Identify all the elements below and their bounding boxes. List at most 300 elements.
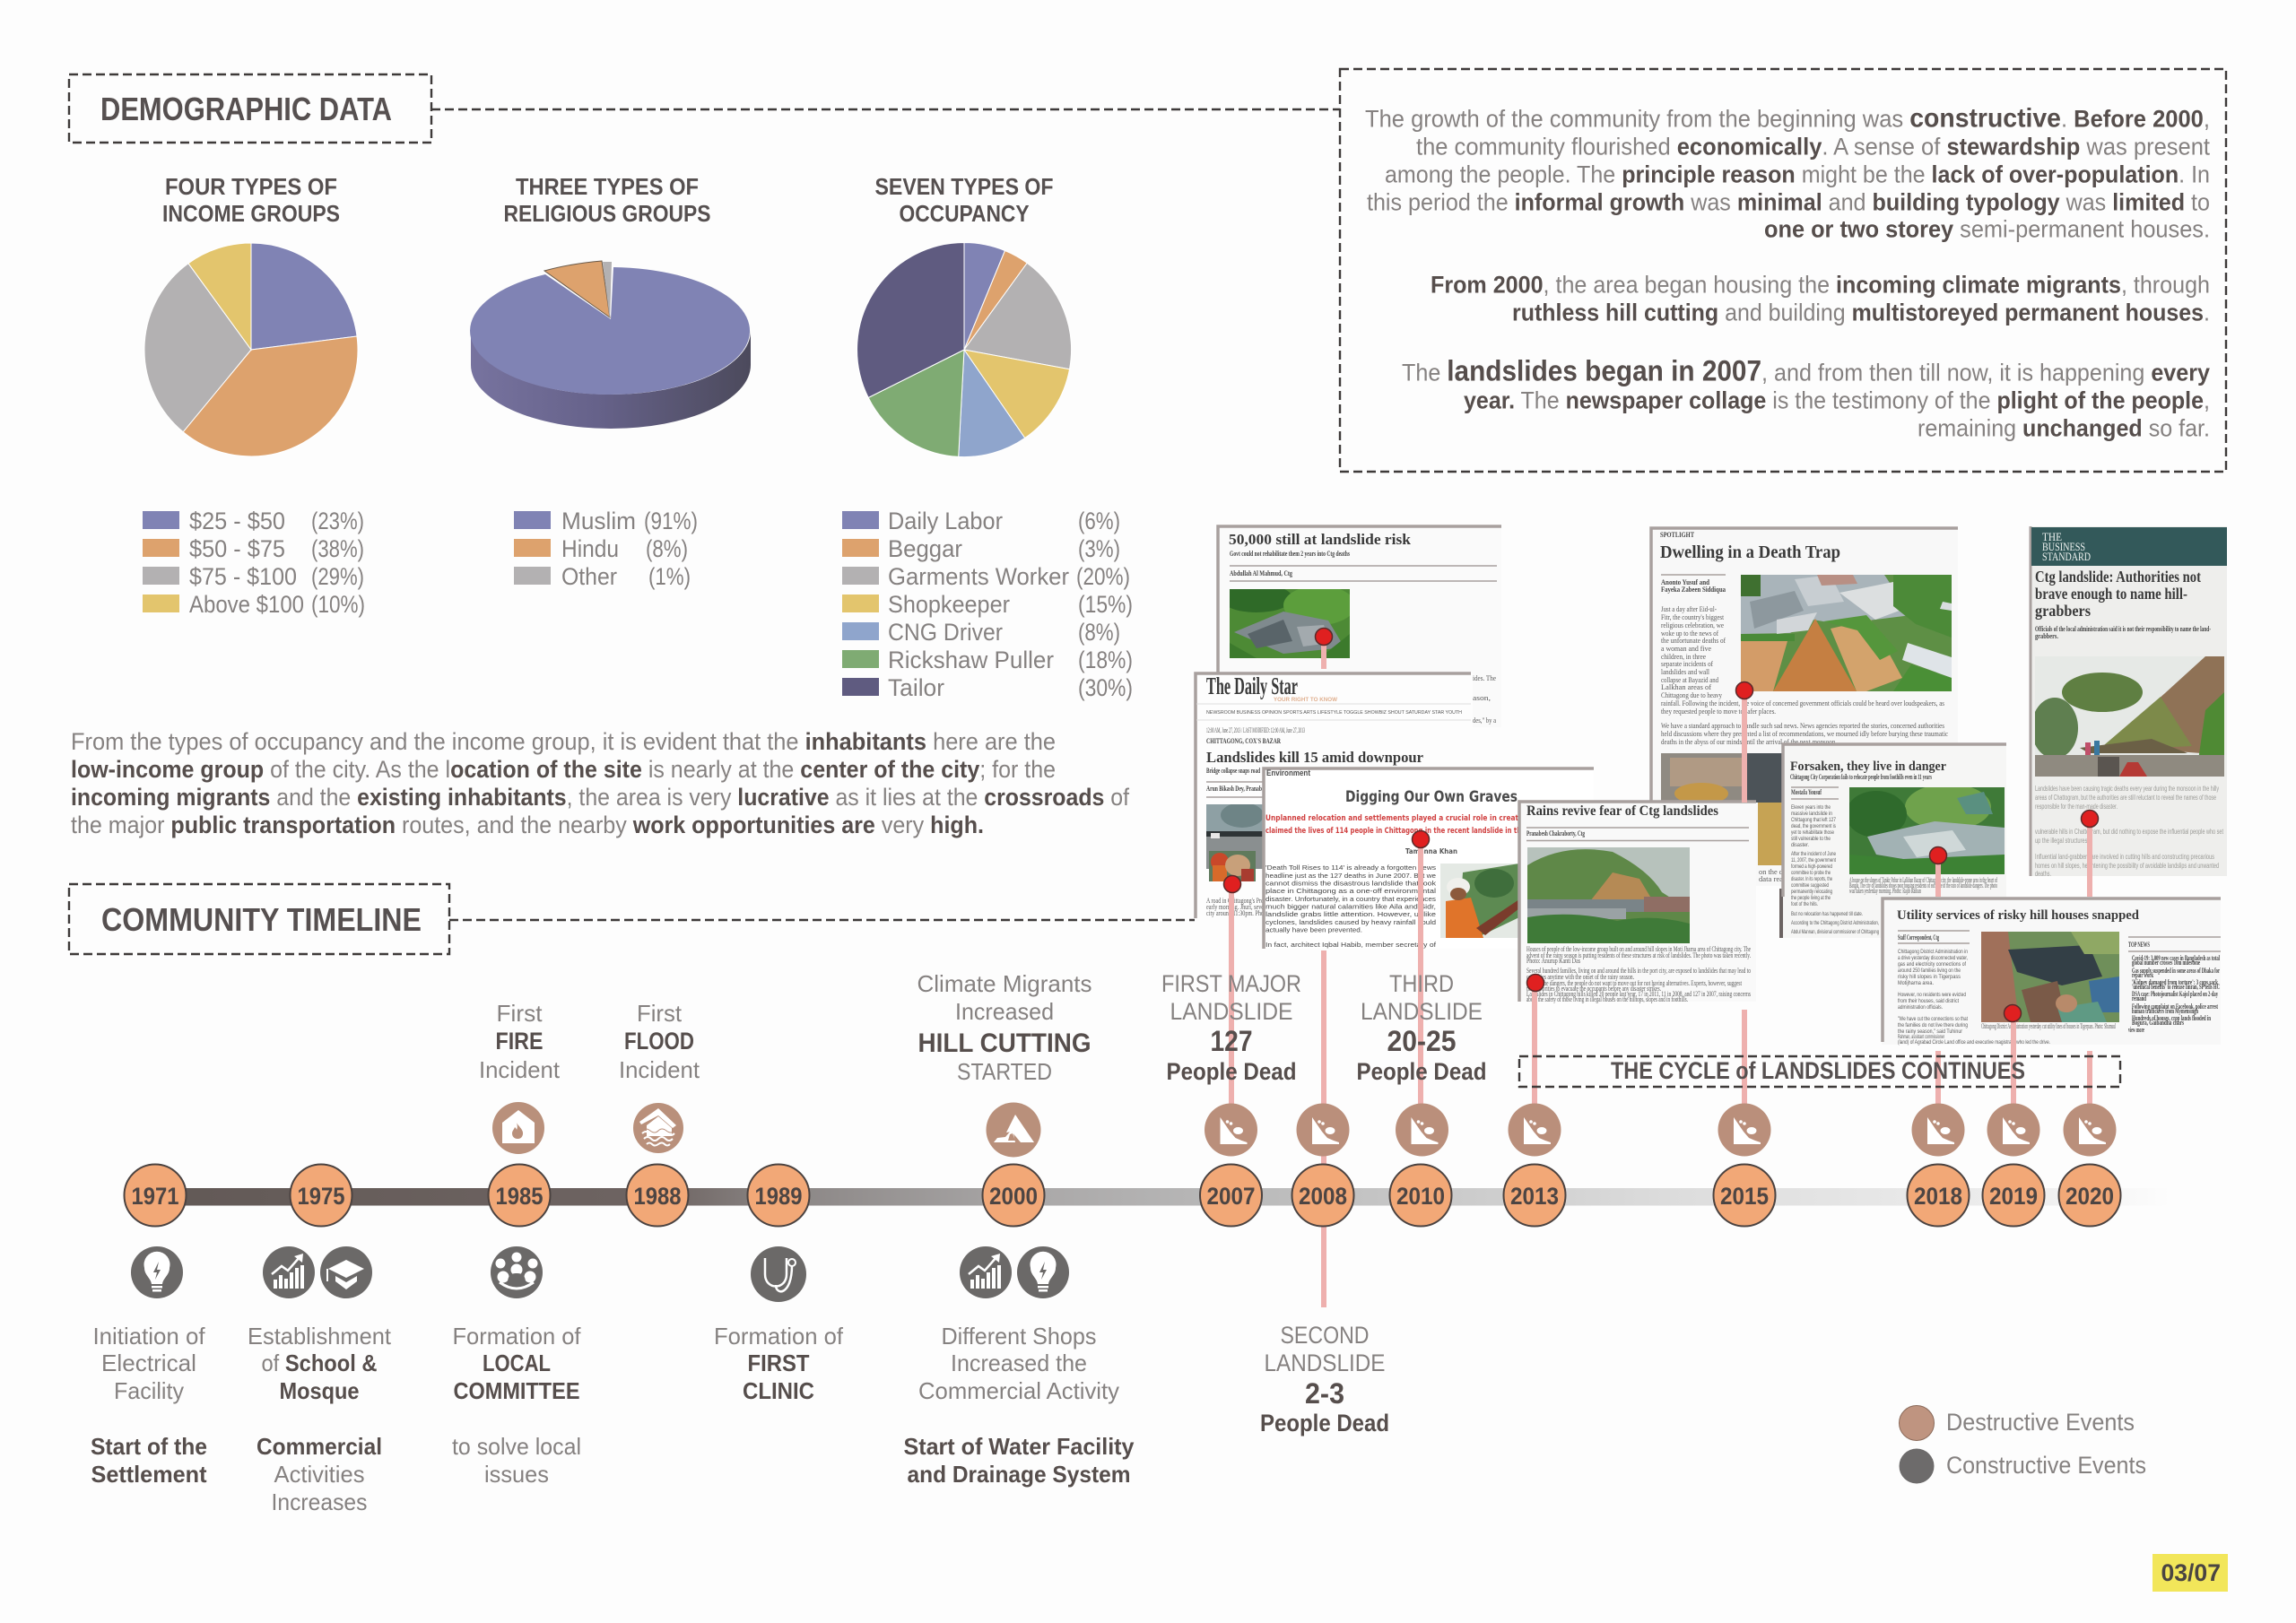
newspaper clipping: The Business Standard: up the illegal structures.: [2035, 837, 2089, 845]
newspaper clipping: The Daily Star: Bridge collapse snaps road: [1206, 767, 1260, 775]
newspaper clipping: Forsaken, they live in danger: But no relocation has happened till date.: [1791, 912, 1863, 917]
newspaper clipping: The Business Standard: [2030, 526, 2227, 878]
newspaper clipping: The Business Standard: Influential land-grabbers are involved in cutting hills and constructing precarious: [2035, 853, 2214, 861]
newspaper clipping: Dwelling in a Death Trap: on the d: [1759, 868, 1783, 876]
event description: 1975: Activities: [274, 1461, 364, 1488]
legend: religious groups: (8%): [646, 535, 688, 562]
newspaper clipping: Forsaken, they live in danger: was taken yesterday morning. Photo: Rajib Raihan: [1849, 887, 1921, 895]
sidebar: top news: [2128, 937, 2221, 1034]
newspaper clipping: 50,000 still at landslide risk: des," by a: [1473, 716, 1496, 725]
newspaper clipping: Digging Our Own Graves: cannot dismiss the disastrous landslide that took: [1265, 879, 1436, 888]
label: hill cutting started: STARTED: [957, 1058, 1052, 1085]
label: second landslide: [1260, 1322, 1389, 1436]
newspaper clipping: The Daily Star: CHITTAGONG, COX'S BAZAR: [1206, 737, 1281, 745]
newspaper clipping: Digging Our Own Graves: Digging Our Own Graves: [1345, 788, 1518, 806]
legend: income groups: $50 - $75: [189, 535, 285, 562]
newspaper clipping: Digging Our Own Graves: Environment: [1266, 768, 1310, 777]
narrative paragraph: before 2000: the community flourished economically. A sense of stewardship was present: [1416, 133, 2210, 160]
newspaper clipping: Utility services of risky hill houses snapped: Rahman, assistant commissioner: [1898, 1035, 1944, 1040]
sidebar: top news: Bogura, Gaibandha chars: [2132, 1019, 2184, 1027]
newspaper clipping: 50,000 still at landslide risk: ides. The: [1473, 674, 1496, 682]
chart title: occupancy: OCCUPANCY: [899, 200, 1030, 227]
newspaper clipping: 50,000 still at landslide risk: Govt could not rehabilitate them 2 years into Ctg deaths: [1230, 550, 1350, 558]
newspaper clipping: Forsaken, they live in danger: the people living at the: [1791, 896, 1831, 901]
newspaper clipping: Utility services of risky hill houses snapped: from their houses, said district: [1898, 999, 1959, 1004]
legend: occupancy: CNG Driver: [888, 619, 1003, 646]
newspaper clipping: 50,000 still at landslide risk: 50,000 still at landslide risk: [1229, 531, 1412, 548]
label: first fire incident: Incident: [479, 1056, 561, 1083]
pie chart: religious groups: [470, 173, 751, 429]
newspaper clipping: Dwelling in a Death Trap: SPOTLIGHT: [1660, 531, 1695, 539]
newspaper clipping: Utility services of risky hill houses snapped: Motijharna area.: [1898, 981, 1934, 986]
icon: flood incident: [633, 1103, 683, 1153]
newspaper clipping: Utility services of risky hill houses snapped: Utility services of risky hill houses snapped: [1897, 908, 2140, 923]
narrative paragraph: from 2000: ruthless hill cutting and building multistoreyed permanent houses.: [1512, 299, 2210, 326]
newspaper clipping: The Business Standard: grabbers: [2035, 602, 2091, 620]
newspaper clipping: Utility services of risky hill houses snapped: the families do not live there during: [1898, 1023, 1968, 1028]
newspaper clipping: Rains revive fear of Ctg landslides: Despite the dangers, the people do not want to move out for not having alternatives. Experts, however, suggest: [1526, 979, 1743, 987]
masthead: The Business Standard: [2031, 527, 2227, 566]
red location pins on articles: [1223, 628, 2099, 1022]
photo: rescue workers: [1209, 851, 1256, 881]
newspaper clipping: Forsaken, they live in danger: dead, the government is: [1791, 824, 1836, 829]
heading: demographic data: [69, 74, 431, 143]
timeline bar: [155, 1188, 2170, 1205]
newspaper clipping: Dwelling in a Death Trap: collapse at Bayazid and: [1661, 676, 1718, 684]
event description: 1975: Increases: [271, 1488, 368, 1515]
icon: clinic stethoscope 1989: [751, 1246, 806, 1302]
newspaper clipping: Digging Our Own Graves: disaster. Unfortunately, in a country that experiences: [1265, 895, 1436, 903]
newspaper clipping: Dwelling in a Death Trap: held discussions where they presented a list of recommendations, we mourned idly before burying these traumatic: [1661, 730, 1948, 738]
newspaper clipping: The Business Standard: brave enough to name hill-: [2035, 585, 2187, 603]
legend: income groups: (38%): [311, 535, 364, 562]
event description: 1989: Formation of: [714, 1323, 844, 1350]
newspaper clipping: Utility services of risky hill houses snapped: However, no residents were evicted: [1898, 993, 1966, 998]
event description: 1975: Mosque: [280, 1377, 359, 1404]
label: third landslide: LANDSLIDE: [1361, 998, 1483, 1025]
newspaper clipping: Rains revive fear of Ctg landslides: about the safety of those living in illegal houses on the hilltops, slopes and in foothills.: [1526, 995, 1688, 1003]
event description: 1985: issues: [484, 1461, 549, 1488]
narrative paragraph: before 2000: [1365, 104, 2210, 242]
newspaper clipping: Digging Our Own Graves: In fact, architect Iqbal Habib, member secretary of: [1265, 941, 1437, 949]
text block: demographic summary: the major public transportation routes, and the nearby work opportunities are very high.: [71, 812, 984, 838]
label: first major landslide: 127: [1211, 1025, 1252, 1057]
narrative paragraph: landslides: year. The newspaper collage is the testimony of the plight of the people,: [1464, 387, 2210, 414]
newspaper clipping: The Business Standard: STANDARD: [2042, 551, 2091, 563]
newspaper clipping: Dwelling in a Death Trap: [1651, 527, 1958, 886]
photo: flooded street: [1206, 804, 1263, 869]
photo: hillside settlement: [1230, 589, 1350, 658]
newspaper clipping: Utility services of risky hill houses snapped: Chittagong District Administration in: [1898, 950, 1968, 955]
legend: occupancy: Rickshaw Puller: [888, 647, 1054, 673]
legend: income groups: [143, 508, 365, 618]
newspaper clipping: Forsaken, they live in danger: yet to rehabilitate those: [1791, 830, 1835, 836]
newspaper clipping: The Business Standard: responsible for the man-made disaster.: [2035, 803, 2118, 811]
timeline year markers: 2015: [1720, 1183, 1769, 1210]
newspaper clipping: Digging Our Own Graves: Tamanna Khan: [1405, 847, 1457, 855]
sidebar: top news: remand: [2132, 994, 2146, 1002]
legend: occupancy: (15%): [1078, 591, 1133, 618]
sidebar: top news: TOP NEWS: [2128, 941, 2150, 949]
newspaper clipping: Digging Our Own Graves: much bigger natural calamities like Aila and Sidr,: [1265, 902, 1436, 911]
newspaper clipping: Rains revive fear of Ctg landslides: advent of the rainy season is putting residents of these structures at risk of landslides. The photo was taken recently.: [1526, 951, 1751, 959]
newspaper clipping: Utility services of risky hill houses snapped: Chittagong District Administration yesterday cut utility lines of houses in Tigerpass. Photo: Shamsul: [1981, 1022, 2116, 1030]
event description: 2000: Increased the: [951, 1350, 1087, 1376]
newspaper clipping: Dwelling in a Death Trap: Dwelling in a Death Trap: [1660, 542, 1840, 562]
chart title: income groups: INCOME GROUPS: [162, 200, 340, 227]
text block: demographic summary: From the types of occupancy and the income group, it is evident that the inhabitants here are the: [71, 728, 1056, 755]
newspaper clipping: The Business Standard: THE: [2042, 531, 2062, 543]
newspaper clipping: Utility services of risky hill houses snapped: (land) of Agrabad Circle Land office and executive magistrate who led the drive.: [1898, 1040, 2050, 1046]
timeline year markers: 2019: [1989, 1183, 2038, 1210]
newspaper clipping: 50,000 still at landslide risk: ason,: [1473, 694, 1491, 702]
newspaper clipping: Digging Our Own Graves: actually have been prevented.: [1265, 925, 1362, 934]
sidebar: top news: Hundreds of houses, crop lands flooded in: [2132, 1014, 2211, 1022]
newspaper clipping: Rains revive fear of Ctg landslides: the authorities to evacuate the occupants before any disaster strikes.: [1526, 985, 1661, 993]
newspaper clipping: Dwelling in a Death Trap: Chittagong due to heavy: [1661, 691, 1722, 699]
newspaper clipping: The Daily Star: 12:00 AM, June 27, 2013 / LAST MODIFIED: 12:00 AM, June 27, 2013: [1206, 726, 1305, 734]
timeline year markers: 1971: [131, 1183, 179, 1210]
timeline year markers: 1985: [495, 1183, 544, 1210]
sidebar: top news: Covid-19: 3,009 new cases in Bangladesh as total: [2132, 954, 2220, 962]
legend: occupancy: (8%): [1078, 619, 1120, 646]
label: third landslide: [1356, 970, 1487, 1085]
newspaper clipping: The Business Standard: Ctg landslide: Authorities not: [2035, 568, 2201, 586]
icon: commercial growth 1975: [263, 1246, 315, 1298]
newspaper clipping: The Daily Star: YOUR RIGHT TO KNOW: [1274, 697, 1338, 703]
newspaper clipping: Rains revive fear of Ctg landslides: Photo: Anurup Kanti Das: [1526, 957, 1580, 965]
newspaper clipping: Utility services of risky hill houses snapped: [1882, 898, 2221, 1046]
newspaper clipping: Rains revive fear of Ctg landslides: Several hundred families, living on and around the hills in the port city, are exposed to landslides that may lead to: [1526, 967, 1751, 975]
photo: landslide scar among roofs: [1741, 575, 1952, 691]
heading: community timeline: COMMUNITY TIMELINE: [101, 901, 422, 938]
newspaper clipping: Dwelling in a Death Trap: woke up to the news of: [1661, 629, 1718, 638]
newspaper clipping: Forsaken, they live in danger: Mostafa Yousuf: [1791, 788, 1822, 796]
newspaper clipping: Dwelling in a Death Trap: religious celebration, we: [1661, 621, 1724, 629]
newspaper clipping: Forsaken, they live in danger: 11, 2007, the government: [1791, 858, 1836, 864]
newspaper clipping: Utility services of risky hill houses snapped: a drive yesterday disconnected water,: [1898, 956, 1968, 961]
label: third landslide: THIRD: [1389, 970, 1454, 997]
legend: occupancy: [842, 508, 1133, 701]
newspaper clipping: The Business Standard: grabbers.: [2035, 632, 2058, 640]
timeline year markers: 1989: [755, 1183, 802, 1210]
legend: event types: [1900, 1406, 2146, 1483]
sidebar: top news: 'unethical benefits' to release Imran, SP tells HC: [2132, 983, 2220, 991]
legend: religious groups: [514, 508, 698, 590]
label: hill cutting started: Increased: [955, 998, 1054, 1025]
newspaper clipping: Forsaken, they live in danger: Chittagong that left 127: [1791, 818, 1837, 823]
newspaper clipping: Rains revive fear of Ctg landslides: Pranabesh Chakraborty, Ctg: [1526, 829, 1585, 838]
photo: crowd by rubble: [1661, 753, 1781, 865]
legend: occupancy: Beggar: [888, 535, 962, 562]
pie chart: occupancy: [857, 173, 1072, 457]
label: second landslide: People Dead: [1260, 1410, 1389, 1436]
icon: electricity bulb 1971: [131, 1246, 183, 1298]
newspaper clipping: Dwelling in a Death Trap: deaths in the abyss of our minds until the arrival of the next monsoon.: [1661, 738, 1837, 746]
icon: school 1975: [320, 1246, 372, 1298]
timeline year markers: 1988: [633, 1183, 682, 1210]
photo: cut hillside and road: [2035, 656, 2224, 777]
event description: 2000: and Drainage System: [908, 1461, 1130, 1488]
event description: 1985: COMMITTEE: [454, 1377, 579, 1404]
newspaper clipping: The Daily Star: A road in Chittagong's Pro: [1206, 897, 1264, 905]
timeline year markers: 2000: [989, 1183, 1038, 1210]
timeline year markers: 2007: [1207, 1183, 1256, 1210]
timeline year markers: 2013: [1510, 1183, 1559, 1210]
label: third landslide: 20-25: [1387, 1025, 1457, 1057]
newspaper clipping: Forsaken, they live in danger: disaster.: [1791, 843, 1809, 848]
newspaper clipping: Forsaken, they live in danger: formed a high-powered: [1791, 864, 1832, 870]
sidebar: top news: global number crosses 10m milestone: [2132, 959, 2200, 967]
event description: 1971: Settlement: [91, 1461, 207, 1488]
newspaper clipping: Forsaken, they live in danger: Abdul Mannan, divisional commissioner of Chittagong: [1791, 930, 1879, 935]
event description: 1975: Establishment: [248, 1323, 392, 1350]
newspaper clipping: Rains revive fear of Ctg landslides: Houses of people of the low-income group built on and around hill slopes in Moti Jharna area of Chittagong city. The: [1526, 945, 1751, 953]
legend: occupancy: Garments Worker: [888, 563, 1069, 590]
newspaper clipping: The Daily Star: NEWSROOM BUSINESS OPINION SPORTS ARTS LIFESTYLE TOGGLE SHOWBIZ SHOUT SATURDAY STAR YOUTH: [1206, 710, 1462, 716]
newspaper clipping: Digging Our Own Graves: landslide grabs little attention. However, unlike: [1265, 910, 1436, 918]
event description: 2000: Different Shops: [942, 1323, 1096, 1350]
landslide icons for 2007 to 2020: [1205, 1103, 2117, 1157]
newspaper clipping: Utility services of risky hill houses snapped: gas and electricity connections of: [1898, 962, 1966, 968]
narrative paragraph: before 2000: The growth of the community from the beginning was constructive. Before 2000,: [1365, 104, 2210, 133]
legend: income groups: $25 - $50: [189, 508, 285, 534]
3D pie: Other slice: [603, 262, 612, 320]
newspaper clipping: Dwelling in a Death Trap: Lalkhan areas of: [1661, 683, 1711, 691]
label: hill cutting started: [917, 970, 1092, 1085]
newspaper clipping: The Business Standard: BUSINESS: [2042, 541, 2085, 553]
legend: income groups: (10%): [311, 591, 365, 618]
panel: community growth narrative: [1340, 69, 2226, 472]
event description: 1971: [91, 1323, 207, 1488]
label: first flood incident: Incident: [619, 1056, 700, 1083]
photo: collapsed shanties in greenery: [1849, 787, 2005, 874]
newspaper clipping: The Business Standard: deaths.: [2035, 870, 2051, 878]
legend: income groups: Above $100: [189, 591, 304, 618]
sidebar: top news: 'Kidney damaged from torture': 3 cops sack: [2132, 978, 2218, 986]
newspaper clipping: Utility services of risky hill houses snapped: administration officials.: [1898, 1005, 1943, 1011]
newspaper clipping: The Daily Star: [1195, 673, 1473, 918]
chart title: religious groups: THREE TYPES OF: [516, 173, 699, 200]
label: first flood incident: FLOOD: [624, 1028, 694, 1055]
newspaper clipping: Dwelling in a Death Trap: Just a day after Eid-ul-: [1661, 605, 1717, 613]
connector lines: articles to timeline: [1231, 637, 2090, 1307]
newspaper clipping: Dwelling in a Death Trap: rainfall. Following the incident, the voice of concerned government officials could be heard over loudspeakers, as: [1661, 699, 1944, 707]
newspaper clipping: Utility services of risky hill houses snapped: risky hill slopes in Tigerpass: [1898, 975, 1961, 980]
newspaper clipping: Digging Our Own Graves: [1263, 768, 1594, 949]
timeline year markers: 1975: [298, 1183, 344, 1210]
event description: 1985: Formation of: [452, 1323, 581, 1350]
sidebar: top news: human traffickers from Mymensingh: [2132, 1007, 2198, 1015]
newspaper clipping: The Daily Star: Landslides kill 15 amid downpour: [1206, 749, 1423, 766]
legend: occupancy: Shopkeeper: [888, 591, 1010, 618]
legend: occupancy: Daily Labor: [888, 508, 1003, 534]
newspaper clipping: The Daily Star: Arun Bikash Dey, Pranab: [1206, 785, 1262, 793]
narrative paragraph: landslides: [1402, 355, 2210, 441]
newspaper clipping: Dwelling in a Death Trap: Anonto Yusuf and: [1661, 578, 1709, 586]
legend: religious groups: (91%): [644, 508, 698, 534]
newspaper clipping: Dwelling in a Death Trap: We have a standard approach to handle such sad news. News agencies reported the stories, concerned authorities: [1661, 722, 1944, 730]
label: first flood incident: [619, 1000, 700, 1083]
label: second landslide: SECOND: [1281, 1322, 1369, 1349]
3D pie: Hindu slice: [544, 261, 610, 317]
newspaper clipping: Rains revive fear of Ctg landslides: Landslides in Chittagong hills killed 20 people last year, 17 in 2011, 11 in 2008, and 127 in 2007, raising concerns: [1526, 990, 1751, 998]
newspaper clipping: Dwelling in a Death Trap: children, in three: [1661, 653, 1706, 661]
icon: fire incident: [492, 1102, 544, 1154]
event description: 1985: to solve local: [452, 1433, 581, 1460]
event description: 1971: Start of the: [91, 1433, 207, 1460]
legend: income groups: (29%): [311, 563, 364, 590]
event description: 2000: Start of Water Facility: [904, 1433, 1135, 1460]
legend: religious groups: (1%): [648, 563, 691, 590]
legend: religious groups: Other: [561, 563, 617, 590]
label: first fire incident: FIRE: [495, 1028, 544, 1055]
text block: demographic summary: [71, 728, 1129, 838]
event description: 1975: of School &: [262, 1350, 377, 1376]
event description: 1971: Electrical: [101, 1350, 196, 1376]
label: first major landslide: LANDSLIDE: [1170, 998, 1293, 1025]
occupancy pie slices: [857, 242, 1072, 457]
newspaper clipping: Forsaken, they live in danger: Eleven years into the: [1791, 805, 1831, 811]
label: first fire incident: [479, 1000, 561, 1083]
label: first major landslide: FIRST MAJOR: [1161, 970, 1301, 997]
newspaper clipping: Dwelling in a Death Trap: data rea: [1759, 875, 1783, 883]
narrative paragraph: from 2000: [1431, 271, 2210, 326]
sidebar: top news: Following complaint on Facebook, police arrest: [2132, 1002, 2218, 1011]
narrative paragraph: from 2000: From 2000, the area began housing the incoming climate migrants, through: [1431, 271, 2210, 298]
timeline year markers: [124, 1164, 2120, 1227]
newspaper clipping: Utility services of risky hill houses snapped: "We have cut the connections so that: [1898, 1017, 1968, 1022]
photo: workers cutting utility lines: [1981, 932, 2119, 1022]
newspaper clipping: Dwelling in a Death Trap: a woman and five: [1661, 645, 1711, 653]
newspaper clipping: Utility services of risky hill houses snapped: the rainy season," said Tuhinur: [1898, 1029, 1962, 1035]
3D pie side wall: [471, 331, 751, 429]
sidebar: top news: DSA case: Photojournalist Kajol placed on 2-day: [2132, 990, 2218, 998]
callout: cycle of landslides continues: THE CYCLE of LANDSLIDES CONTINUES: [1611, 1057, 2025, 1084]
legend: occupancy: (20%): [1076, 563, 1130, 590]
legend: religious groups: Muslim: [561, 508, 636, 534]
newspaper clipping: Forsaken, they live in danger: Chittagong City Corporation fails to relocate people from foothills even in 11 years: [1790, 773, 1932, 781]
narrative paragraph: landslides: remaining unchanged so far.: [1918, 414, 2210, 441]
label: second landslide: LANDSLIDE: [1265, 1350, 1385, 1376]
icon: local committee 1985: [491, 1246, 543, 1298]
legend: occupancy: (6%): [1078, 508, 1120, 534]
newspaper clipping: Digging Our Own Graves: headline just as the 127 deaths in June 2007. But we: [1265, 872, 1436, 880]
icon: commercial growth 2000: [960, 1246, 1012, 1298]
newspaper clipping: 50,000 still at landslide risk: Abdullah Al Mahmud, Ctg: [1230, 569, 1292, 577]
text block: demographic summary: incoming migrants and the existing inhabitants, the area is very lucrative as it lies at the crossroads of: [71, 784, 1129, 811]
newspaper clipping: Forsaken, they live in danger: committee to probe the: [1791, 871, 1831, 876]
timeline year markers: 2010: [1396, 1183, 1445, 1210]
event description: 1989: FIRST: [748, 1350, 810, 1376]
legend: income groups: $75 - $100: [189, 563, 297, 590]
timeline year markers: 2008: [1299, 1183, 1347, 1210]
label: hill cutting started: Climate Migrants: [917, 970, 1092, 997]
newspaper clipping: The Daily Star: city around 11:30pm. Pho: [1206, 909, 1264, 917]
newspaper clipping: Dwelling in a Death Trap: landslides and wall: [1661, 668, 1710, 676]
text: Bangla. The city of landslides shows poor housing residents of each one in the rain of landslide dangers. The photo: [1849, 881, 1997, 890]
timeline year markers: 2018: [1914, 1183, 1962, 1210]
newspaper clipping: Dwelling in a Death Trap: the unfortunate deaths of: [1661, 637, 1726, 645]
label: second landslide: 2-3: [1305, 1377, 1344, 1410]
newspaper clipping: Forsaken, they live in danger: permanently relocating: [1791, 890, 1832, 895]
legend: occupancy: (3%): [1078, 535, 1120, 562]
sidebar: top news: view more: [2128, 1026, 2144, 1034]
chart title: religious groups: RELIGIOUS GROUPS: [504, 200, 710, 227]
narrative paragraph: before 2000: among the people. The principle reason might be the lack of over-population. In: [1385, 161, 2210, 188]
newspaper clipping: Digging Our Own Graves: cyclones, landslides caused by heavy rainfall could: [1265, 918, 1436, 926]
pie chart: income groups: [144, 173, 358, 456]
icon: hill cutting: [987, 1103, 1040, 1157]
event description: 1989: [714, 1323, 844, 1404]
newspaper clipping: Utility services of risky hill houses snapped: Staff Correspondent, Ctg: [1898, 933, 1939, 942]
masthead: The Daily Star: The Daily Star: [1206, 673, 1298, 699]
page number tag: 03/07: [2161, 1559, 2221, 1586]
chart title: income groups: FOUR TYPES OF: [165, 173, 337, 200]
legend: occupancy: (30%): [1078, 674, 1133, 701]
newspaper clipping: Rains revive fear of Ctg landslides: casualties anytime with the onset of the rainy season.: [1526, 973, 1634, 981]
event description: 1971: Initiation of: [93, 1323, 205, 1350]
sidebar: top news: Gas supply suspended in some areas of Dhaka for: [2132, 967, 2220, 975]
chart title: occupancy: SEVEN TYPES OF: [875, 173, 1053, 200]
photo: worker with foliage: [1440, 864, 1518, 938]
3D pie top: Muslim slice: [470, 267, 750, 395]
narrative paragraph: before 2000: one or two storey semi-permanent houses.: [1764, 215, 2210, 242]
sidebar: top news: repair work: [2132, 971, 2153, 979]
newspaper clipping: Forsaken, they live in danger: disaster. In its reports, the: [1791, 877, 1832, 882]
newspaper clipping: Digging Our Own Graves: Unplanned relocation and settlements played a crucial role in creat: [1265, 814, 1518, 823]
newspaper clipping: Digging Our Own Graves: 'Death Toll Rises to 114' is already a forgotten news: [1265, 864, 1436, 872]
event description: 1985: LOCAL: [483, 1350, 551, 1376]
legend: occupancy: (18%): [1078, 647, 1133, 673]
newspaper clipping: Forsaken, they live in danger: [1779, 743, 2006, 938]
event description: 1985: [452, 1323, 581, 1488]
narrative paragraph: before 2000: this period the informal growth was minimal and building typology was limited to: [1367, 188, 2210, 215]
legend: event types: Constructive Events: [1946, 1452, 2146, 1479]
text: A house on the slopes of Tankir Pahar in Lalkhan Bazar of Chittagong city, the landslide-prone area in the heart of: [1849, 876, 1997, 884]
icon: electricity bulb 2000: [1017, 1246, 1069, 1298]
event description: 1971: Facility: [114, 1377, 184, 1404]
label: first major landslide: People Dead: [1166, 1058, 1297, 1085]
newspaper clipping: Forsaken, they live in danger: According to the Chittagong District Administration,: [1791, 921, 1879, 926]
newspaper clipping: Rains revive fear of Ctg landslides: Rains revive fear of Ctg landslides: [1526, 803, 1718, 819]
heading: demographic data: DEMOGRAPHIC DATA: [100, 91, 392, 127]
newspaper clipping: Forsaken, they live in danger: foot of the hills.: [1791, 902, 1818, 907]
newspaper clipping: 50,000 still at landslide risk: [1218, 525, 1501, 727]
newspaper clipping: Dwelling in a Death Trap: Fayeka Zabeen Siddiqua: [1661, 586, 1726, 594]
newspaper clipping: Utility services of risky hill houses snapped: around 250 families living on the: [1898, 968, 1961, 974]
newspaper clipping: Forsaken, they live in danger: After the incident of June: [1791, 852, 1836, 857]
event description: 1975: [248, 1323, 392, 1515]
event description: 2000: Commercial Activity: [918, 1377, 1119, 1404]
newspaper clipping: The Daily Star: early morning. Jhuri, seve: [1206, 903, 1264, 911]
legend: religious groups: Hindu: [561, 535, 619, 562]
newspaper clipping: Forsaken, they live in danger: committee suggested: [1791, 883, 1829, 889]
text block: demographic summary: low-income group of the city. As the location of the site is nearly at the center of the city; for the: [71, 756, 1056, 783]
label: third landslide: People Dead: [1356, 1058, 1487, 1085]
newspaper clipping: Digging Our Own Graves: claimed the lives of 114 people in Chittagong in the recent landslide in th: [1265, 827, 1521, 836]
newspaper clipping: Rains revive fear of Ctg landslides: [1518, 801, 1756, 1003]
newspaper clipping: The Business Standard: homes on hill slopes, heightening the possibility of avoidable landslips and unwanted: [2035, 862, 2219, 870]
newspaper clipping: Dwelling in a Death Trap: Fitr, the country's biggest: [1661, 613, 1725, 621]
page number tag: [2152, 1554, 2228, 1592]
label: hill cutting started: HILL CUTTING: [918, 1028, 1091, 1058]
newspaper clipping: Dwelling in a Death Trap: they requested people to move to safer places.: [1661, 707, 1776, 716]
timeline year markers: 2020: [2066, 1183, 2114, 1210]
label: first fire incident: First: [497, 1000, 543, 1027]
newspaper clipping: The Business Standard: Officials of the local administration said it is not their responsibility to name the land-: [2035, 625, 2211, 633]
narrative paragraph: landslides: The landslides began in 2007, and from then till now, it is happening every: [1402, 355, 2210, 387]
